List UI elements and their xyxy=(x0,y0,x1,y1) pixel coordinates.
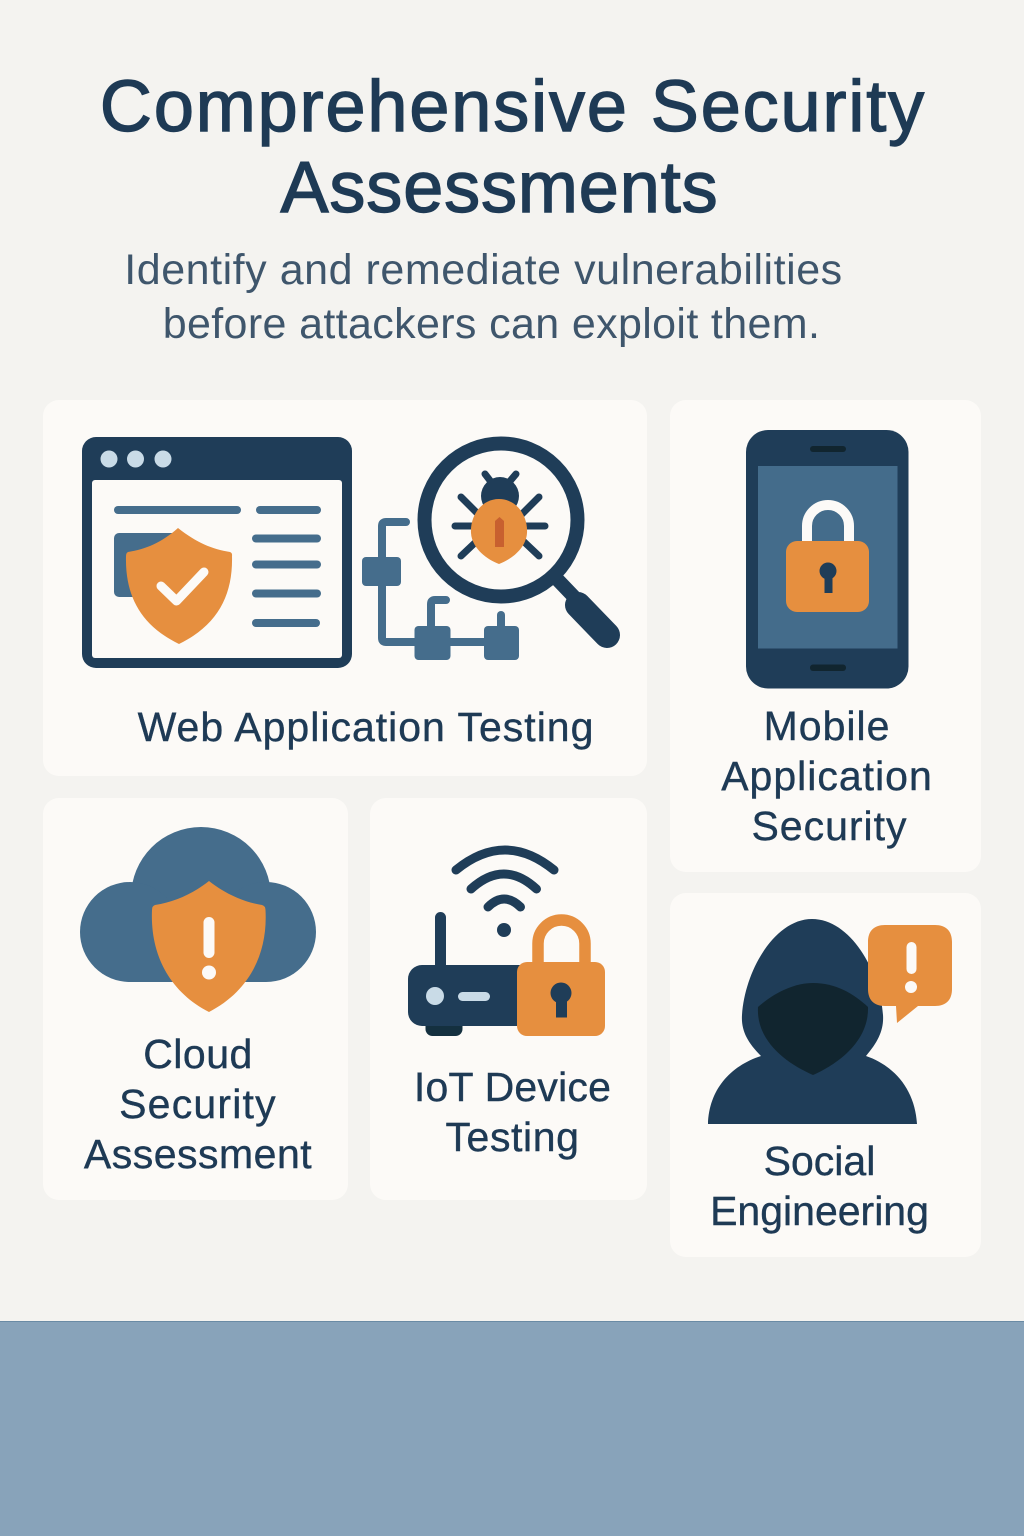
panel: iot device testing xyxy=(370,798,647,1200)
icon: hooded attacker with alert bubble xyxy=(708,919,952,1124)
title: Comprehensive Security xyxy=(100,67,926,147)
label: cloud security assessment: Security xyxy=(119,1081,277,1127)
label: social engineering: Social xyxy=(764,1138,875,1184)
panel: mobile application security xyxy=(670,400,981,872)
label: mobile application security xyxy=(721,703,933,849)
panel: cloud security assessment xyxy=(43,798,348,1200)
icon: magnifying glass with bug xyxy=(424,444,607,635)
subtitle: Identify and remediate vulnerabilities xyxy=(124,246,843,294)
icon: cloud with shield xyxy=(80,827,316,1012)
title: Assessments xyxy=(280,148,719,228)
footer band xyxy=(0,1321,1024,1536)
label: iot device testing xyxy=(414,1064,611,1160)
label: mobile application security: Security xyxy=(751,803,908,849)
label: web application testing: Web Application Testing xyxy=(138,704,594,750)
panel: web application testing xyxy=(43,400,647,776)
label: mobile application security: Mobile xyxy=(764,703,890,749)
title xyxy=(100,67,926,228)
label: cloud security assessment: Cloud xyxy=(143,1031,253,1077)
icon: circuit network xyxy=(362,522,519,660)
icon: smartphone with padlock xyxy=(746,430,908,688)
label: cloud security assessment: Assessment xyxy=(84,1131,312,1177)
label: cloud security assessment xyxy=(84,1031,312,1177)
icon: browser window with shield xyxy=(82,437,352,668)
panel: social engineering xyxy=(670,893,981,1257)
label: social engineering: Engineering xyxy=(710,1188,929,1234)
label: mobile application security: Application xyxy=(721,753,933,799)
subtitle: before attackers can exploit them. xyxy=(163,300,820,348)
label: social engineering xyxy=(710,1138,929,1234)
label: iot device testing: Testing xyxy=(445,1114,580,1160)
icon: iot router with wifi and padlock xyxy=(408,850,605,1036)
subtitle xyxy=(124,246,843,348)
label: iot device testing: IoT Device xyxy=(414,1064,611,1110)
